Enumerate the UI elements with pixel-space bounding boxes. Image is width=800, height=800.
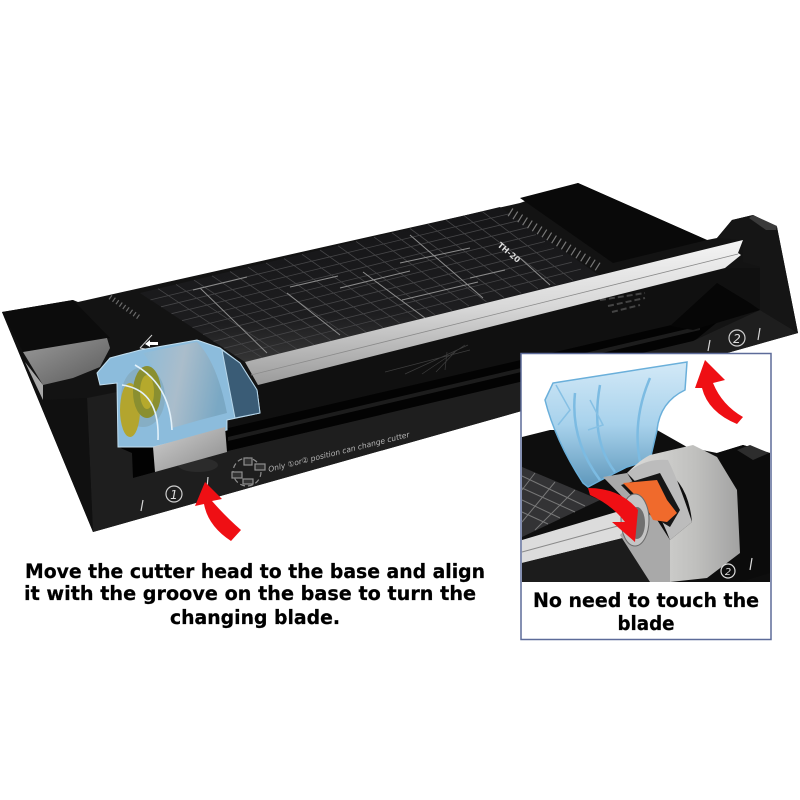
inset cavity xyxy=(621,473,680,527)
inset caption: No need to touch the xyxy=(533,589,759,612)
left side wall xyxy=(2,312,93,532)
red arrow: turn knob xyxy=(588,488,638,542)
inset white rail xyxy=(522,510,627,563)
inset tower xyxy=(717,445,770,582)
white rail xyxy=(245,240,743,385)
base instruction icon xyxy=(232,458,265,486)
drum xyxy=(143,342,227,428)
cutter head xyxy=(97,340,260,472)
silver foot xyxy=(153,427,227,472)
red arrow: open cover xyxy=(695,360,743,424)
inset silver plate xyxy=(603,473,670,582)
main caption: Move the cutter head to the base and align xyxy=(25,560,485,583)
fan lines under rail xyxy=(385,293,645,374)
main caption: it with the groove on the base to turn the xyxy=(24,582,476,605)
panel: paper trimmer base xyxy=(2,183,798,532)
blade wheel xyxy=(121,367,165,427)
left grey stop xyxy=(23,338,110,385)
inset open blue cover xyxy=(545,362,687,487)
marker 1 xyxy=(166,486,182,502)
slot xyxy=(228,320,720,451)
band under rail xyxy=(228,268,760,427)
position markers on base: 1 xyxy=(170,488,178,502)
inset orange knob xyxy=(623,480,677,522)
right tower xyxy=(670,215,798,333)
inset mat xyxy=(522,467,600,537)
inset caption xyxy=(533,589,759,635)
position markers on base: 2 xyxy=(733,332,741,346)
left end block xyxy=(2,300,110,352)
inset black base xyxy=(522,430,770,582)
blue cover xyxy=(97,340,260,447)
inset caption background xyxy=(522,582,770,638)
model label: TH-20 xyxy=(496,241,522,265)
right paper holder block xyxy=(520,183,707,263)
front face of base xyxy=(87,310,798,532)
main caption xyxy=(24,560,485,629)
notch under cutter xyxy=(118,420,228,478)
marker 2 xyxy=(729,330,745,346)
red arrow: points to groove xyxy=(195,482,241,541)
panel: inset close-up: 2 xyxy=(725,567,731,578)
panel: inset close-up xyxy=(521,354,771,640)
cutting grid mat xyxy=(110,207,600,362)
inset metal hub xyxy=(621,494,649,546)
wheel shadow xyxy=(178,458,218,472)
arrow marker on mat xyxy=(140,335,158,350)
main caption: changing blade. xyxy=(170,606,340,629)
base instruction text: Only ①or② position can change cutter xyxy=(267,430,411,474)
inset grey cutter body xyxy=(627,445,740,582)
inset caption: blade xyxy=(618,612,674,635)
position markers on base xyxy=(141,328,760,511)
ruler scale xyxy=(510,212,600,268)
marker 2 in inset xyxy=(721,564,735,578)
